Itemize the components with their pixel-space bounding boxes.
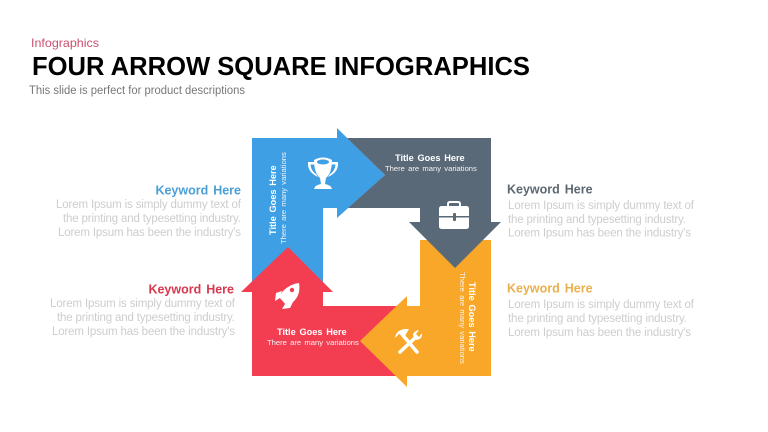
text block: blue keyword — [56, 184, 242, 239]
text block: orange keyword: Lorem Ipsum has been the industry's — [508, 327, 691, 339]
text block: red keyword: Lorem Ipsum is simply dummy text of — [50, 298, 236, 310]
orange arrow label: Title Goes Here — [467, 282, 477, 352]
text block: gray keyword: the printing and typesetting industry. — [508, 214, 686, 226]
text block: gray keyword: Lorem Ipsum is simply dummy text of — [508, 200, 695, 212]
text block: blue keyword: the printing and typesetting industry. — [63, 213, 241, 225]
title: FOUR ARROW SQUARE INFOGRAPHICS — [32, 51, 530, 81]
text block: red keyword: the printing and typesetting industry. — [57, 312, 235, 324]
icon: rocket — [275, 283, 299, 309]
text block: red keyword: Lorem Ipsum has been the industry's — [52, 326, 235, 338]
arrow: gray — [347, 138, 501, 268]
eyebrow label: Infographics — [31, 36, 99, 50]
arrow: blue — [252, 128, 385, 300]
header — [29, 36, 530, 97]
text block: gray keyword: Keyword Here — [507, 182, 593, 196]
subtitle: This slide is perfect for product descriptions — [29, 85, 245, 97]
text block: blue keyword: Lorem Ipsum is simply dummy text of — [56, 199, 242, 211]
text block: gray keyword — [507, 182, 695, 240]
text block: orange keyword: the printing and typesetting industry. — [508, 313, 687, 325]
blue arrow label: There are many variations — [279, 152, 288, 244]
text block: orange keyword: Lorem Ipsum is simply dummy text of — [508, 299, 695, 311]
text block: red keyword — [50, 282, 236, 338]
icon: trophy — [308, 158, 338, 189]
text block: red keyword: Keyword Here — [148, 282, 234, 296]
text block: orange keyword: Keyword Here — [507, 282, 593, 296]
text block: gray keyword: Lorem Ipsum has been the industry's — [508, 228, 691, 240]
arrow: orange — [360, 240, 491, 387]
text block: blue keyword: Keyword Here — [155, 184, 241, 198]
text block: orange keyword — [507, 282, 695, 339]
red arrow label — [267, 327, 359, 347]
arrow: red — [241, 247, 400, 376]
red arrow label: There are many variations — [267, 338, 359, 347]
gray arrow label — [385, 153, 477, 173]
orange arrow label: There are many variations — [458, 272, 467, 364]
icon: briefcase — [439, 202, 469, 229]
gray arrow label: Title Goes Here — [395, 153, 465, 163]
orange arrow label — [458, 272, 477, 364]
gray arrow label: There are many variations — [385, 164, 477, 173]
blue arrow label: Title Goes Here — [268, 165, 278, 235]
blue arrow label — [268, 152, 288, 244]
red arrow label: Title Goes Here — [277, 327, 347, 337]
text block: blue keyword: Lorem Ipsum has been the industry's — [58, 227, 241, 239]
icon: hammer and wrench — [395, 329, 422, 352]
